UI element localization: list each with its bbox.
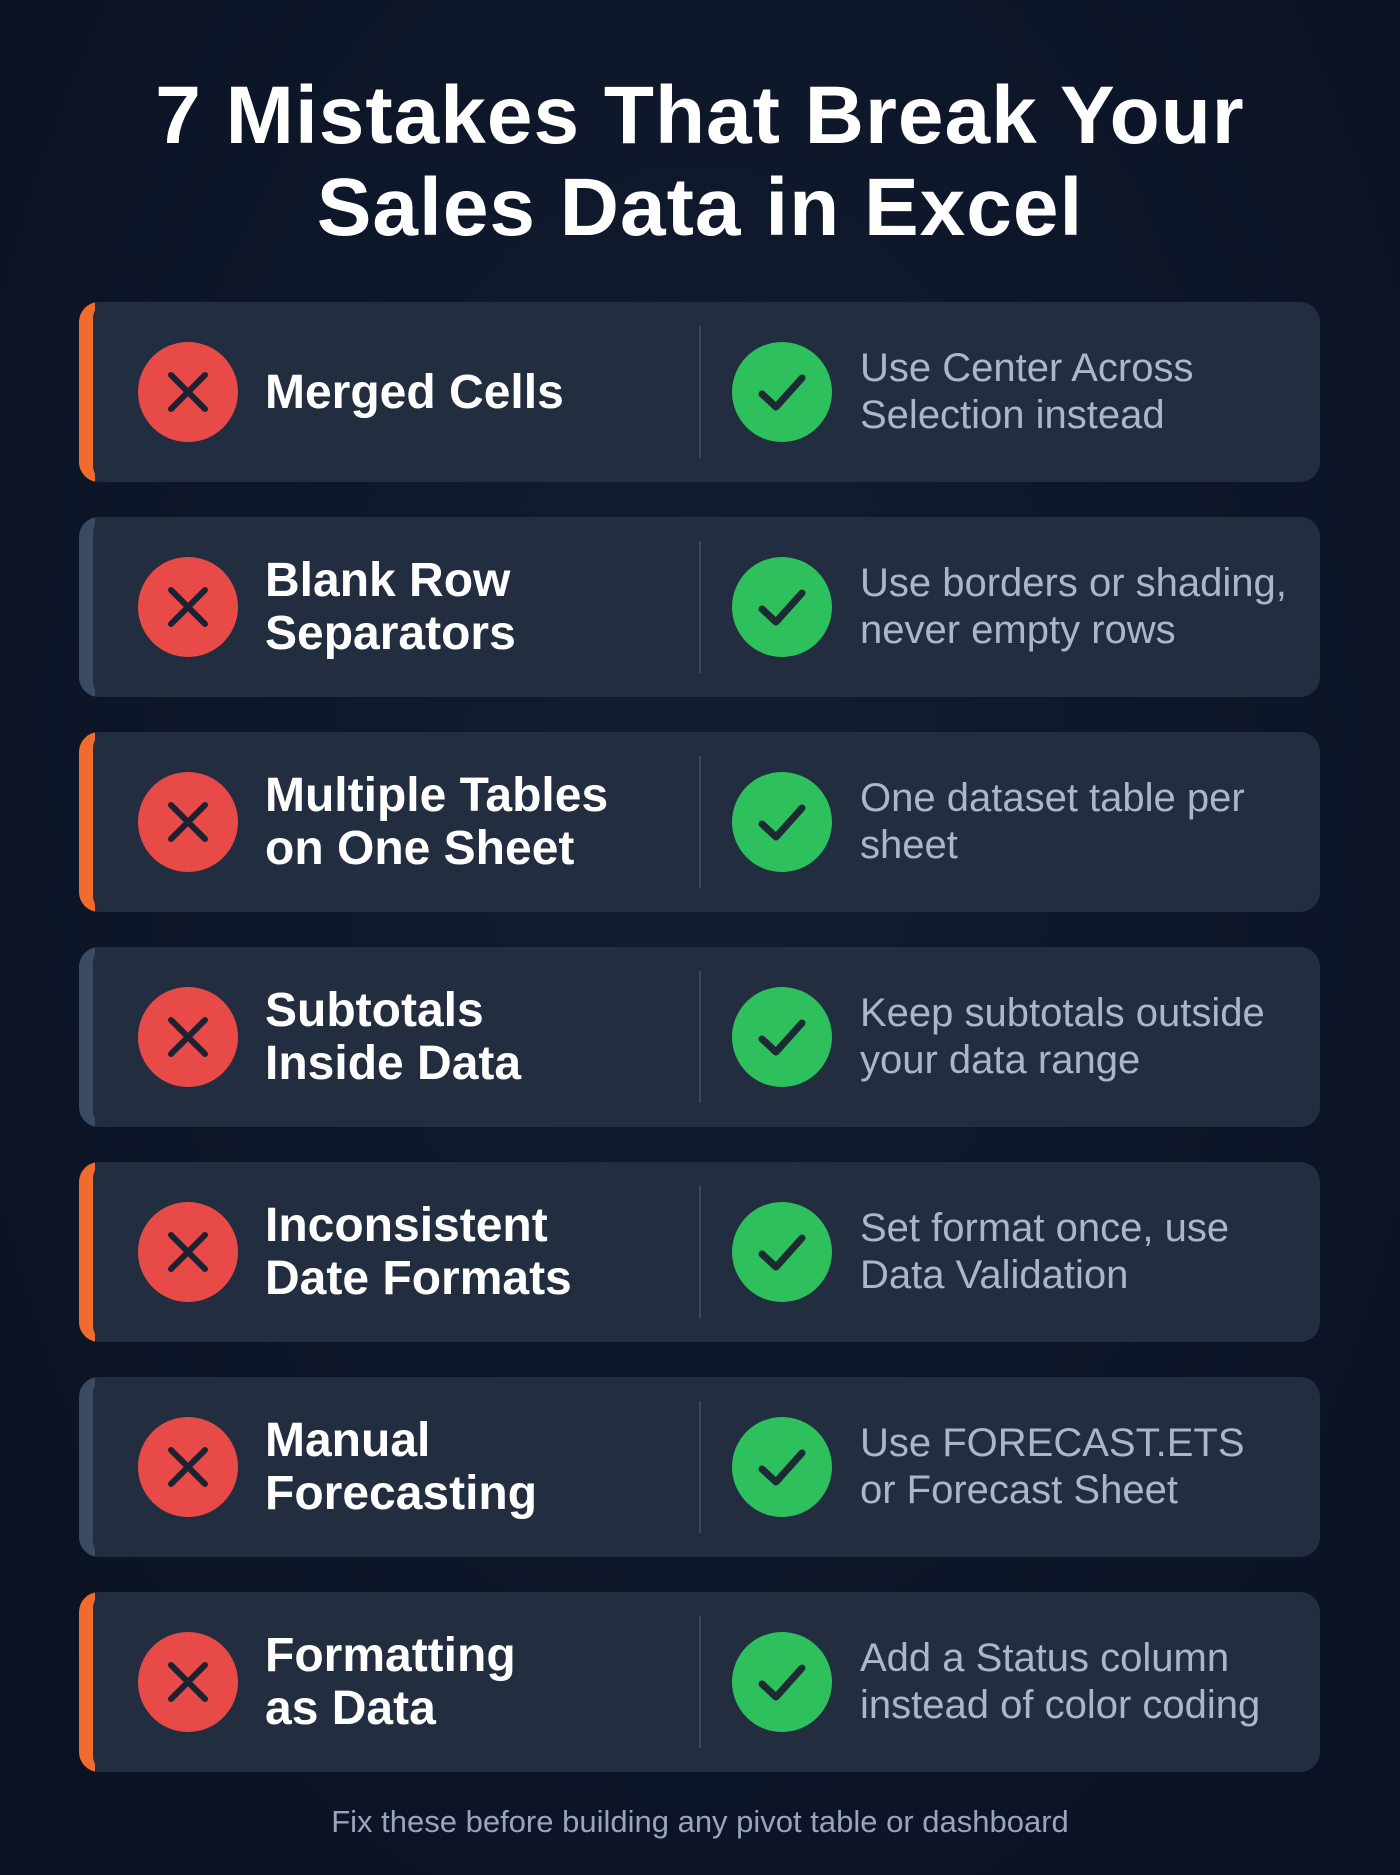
- mistake text: Formatting: [265, 1629, 516, 1682]
- mistake text: Manual: [265, 1414, 430, 1467]
- mistake text: as Data: [265, 1682, 436, 1735]
- fix text: [860, 346, 1193, 437]
- icon: red x: [138, 1417, 238, 1517]
- fix text: sheet: [860, 823, 958, 867]
- fix text: [860, 776, 1245, 867]
- mistake text: Multiple Tables: [265, 769, 608, 822]
- card 4: subtotals: [79, 947, 1320, 1127]
- fix text: instead of color coding: [860, 1683, 1260, 1727]
- fix text: Set format once, use: [860, 1206, 1229, 1250]
- mistake text: [265, 1629, 516, 1735]
- icon: red x: [138, 1202, 238, 1302]
- card 1: merged cells: [79, 302, 1320, 482]
- icon: green check: [732, 557, 832, 657]
- fix text: Data Validation: [860, 1253, 1128, 1297]
- mistake text: [265, 1414, 537, 1520]
- title: Sales Data in Excel: [317, 162, 1083, 253]
- fix text: Use Center Across: [860, 346, 1193, 390]
- title: [155, 70, 1245, 253]
- card 3: multiple tables: [79, 732, 1320, 912]
- mistake text: Inside Data: [265, 1037, 521, 1090]
- fix text: [860, 1421, 1245, 1512]
- icon: green check: [732, 1417, 832, 1517]
- mistake text: [265, 984, 522, 1090]
- fix text: [860, 991, 1265, 1082]
- icon: red x: [138, 557, 238, 657]
- fix text: Selection instead: [860, 393, 1165, 437]
- mistake text: on One Sheet: [265, 822, 574, 875]
- card 2: blank row separators: [79, 517, 1320, 697]
- icon: green check: [732, 1632, 832, 1732]
- fix text: [860, 1206, 1229, 1297]
- mistake text: Subtotals: [265, 984, 484, 1037]
- title: 7 Mistakes That Break Your: [155, 70, 1245, 161]
- fix text: One dataset table per: [860, 776, 1245, 820]
- mistake text: [265, 1199, 572, 1305]
- icon: red x: [138, 342, 238, 442]
- icon: red x: [138, 772, 238, 872]
- mistake text: Merged Cells: [265, 366, 564, 418]
- mistake text: Blank Row: [265, 554, 510, 607]
- card 7: formatting as data: [79, 1592, 1320, 1772]
- fix text: Add a Status column: [860, 1636, 1229, 1680]
- fix text: [860, 1636, 1260, 1727]
- mistake text: [265, 554, 516, 660]
- mistake text: Inconsistent: [265, 1199, 548, 1252]
- card 6: manual forecasting: [79, 1377, 1320, 1557]
- icon: green check: [732, 987, 832, 1087]
- mistake text: Forecasting: [265, 1467, 537, 1520]
- mistake text: Separators: [265, 607, 516, 660]
- fix text: [860, 561, 1287, 652]
- footer note: Fix these before building any pivot table or dashboard: [331, 1804, 1069, 1839]
- icon: green check: [732, 342, 832, 442]
- fix text: or Forecast Sheet: [860, 1468, 1178, 1512]
- icon: green check: [732, 772, 832, 872]
- card 5: date formats: [79, 1162, 1320, 1342]
- fix text: Use FORECAST.ETS: [860, 1421, 1245, 1465]
- icon: red x: [138, 1632, 238, 1732]
- fix text: Use borders or shading,: [860, 561, 1287, 605]
- icon: red x: [138, 987, 238, 1087]
- mistake text: [265, 769, 608, 875]
- icon: green check: [732, 1202, 832, 1302]
- fix text: never empty rows: [860, 608, 1176, 652]
- fix text: Keep subtotals outside: [860, 991, 1265, 1035]
- mistake text: Date Formats: [265, 1252, 572, 1305]
- fix text: your data range: [860, 1038, 1140, 1082]
